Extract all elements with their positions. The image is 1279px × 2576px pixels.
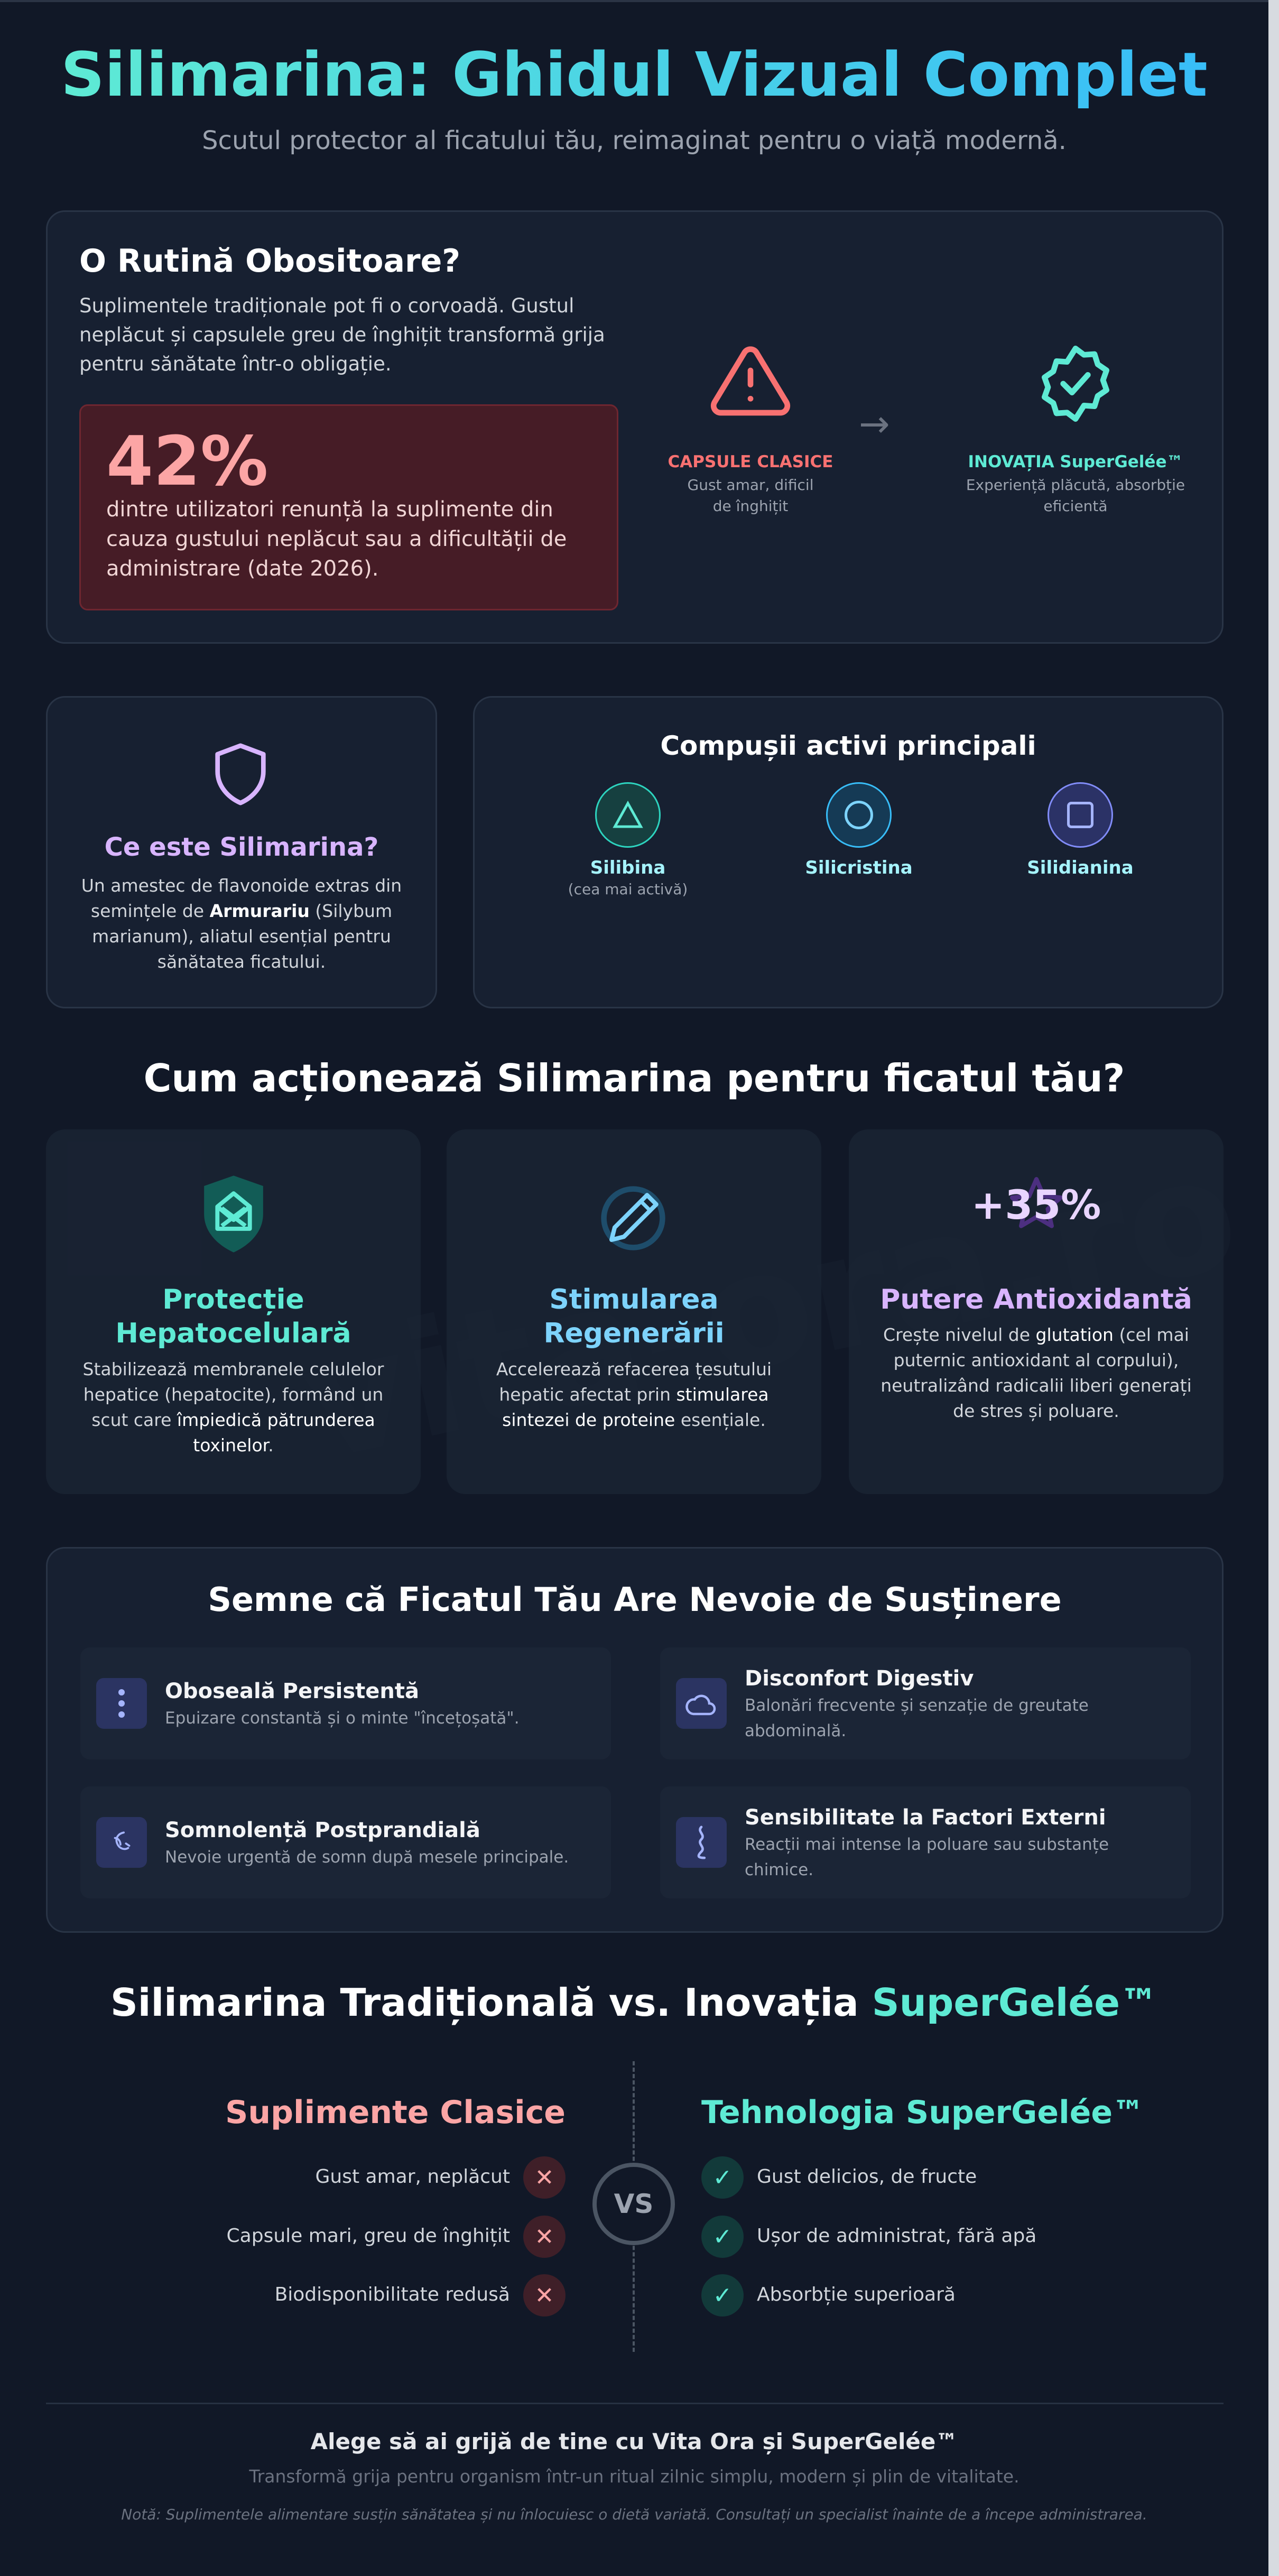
panel: active compounds <box>473 696 1224 1008</box>
title <box>543 1284 725 1349</box>
icon: dots <box>96 1678 147 1729</box>
sign: digestive: Balonări frecvente și senzație de greutate abdominală. <box>745 1696 1089 1740</box>
divider: dashed line <box>633 2061 635 2352</box>
card: protection <box>46 1129 421 1494</box>
sign: sensitivity: Reacții mai intense la poluare sau substanțe chimice. <box>745 1835 1109 1879</box>
column: classic: ✕ <box>535 2164 554 2191</box>
column: classic: ✕ <box>535 2282 554 2309</box>
title: Hepatocelulară <box>115 1318 351 1349</box>
panel: what is silymarin <box>46 696 437 1008</box>
compound: silibina <box>568 782 688 898</box>
panel: signs <box>46 1547 1224 1933</box>
icon: shield envelope <box>204 1175 263 1253</box>
icon: sleep <box>96 1817 147 1868</box>
title: Silimarina: Ghidul Vizual Complet <box>61 40 1208 110</box>
text: Un amestec de flavonoide extras din semințele de Armurariu (Silybum marianum), aliatul esențial pentru sănătatea ficatului. <box>81 875 402 972</box>
heading: Semne că Ficatul Tău Are Nevoie de Susținere <box>208 1580 1062 1619</box>
compound: silidianina <box>1027 782 1134 878</box>
column: classic: Capsule mari, greu de înghițit <box>227 2225 510 2247</box>
heading: comparison: Silimarina Tradițională vs. Inovația SuperGelée™ <box>110 1980 1158 2025</box>
sign: sensitivity: Sensibilitate la Factori Externi <box>745 1805 1106 1830</box>
sign: sleepiness <box>80 1786 611 1898</box>
icon: +35% star: +35% <box>971 1181 1101 1228</box>
compound: silibina: (cea mai activă) <box>568 881 688 898</box>
title: Putere Antioxidantă <box>880 1284 1192 1315</box>
heading: routine: O Rutină Obositoare? <box>79 243 460 280</box>
compound: silibina: Silibina <box>590 857 665 878</box>
icon: check badge <box>1042 346 1109 422</box>
icon: shield <box>215 743 266 805</box>
sign: fatigue <box>80 1647 611 1759</box>
sign: digestive <box>660 1647 1191 1759</box>
icon: warning <box>710 346 791 415</box>
card: antioxidant <box>849 1129 1224 1494</box>
label: capsule clasice <box>668 452 833 515</box>
sign: fatigue: Epuizare constantă și o minte "încețoșată". <box>165 1709 520 1728</box>
subtitle: Scutul protector al ficatului tău, reimaginat pentru o viață modernă. <box>202 126 1067 155</box>
callout: 42% <box>79 404 618 610</box>
footer: Transformă grija pentru organism într-un ritual zilnic simplu, modern și plin de vitalitate. <box>249 2466 1020 2487</box>
column: classic: Biodisponibilitate redusă <box>275 2284 510 2305</box>
text: Stabilizează membranele celulelor hepatice (hepatocite), formând un scut care împiedică pătrunderea toxinelor. <box>83 1359 384 1456</box>
card: regeneration <box>447 1129 821 1494</box>
vs badge: VS <box>614 2189 653 2219</box>
heading: Compușii activi principali <box>660 730 1036 761</box>
text: Crește nivelul de glutation (cel mai puternic antioxidant al corpului), neutralizând radicalii liberi generați de stres și poluare. <box>881 1324 1192 1421</box>
column: classic: Suplimente Clasice <box>225 2094 566 2131</box>
sign: digestive: Disconfort Digestiv <box>745 1666 974 1691</box>
panel: routine <box>46 210 1224 644</box>
text: routine intro: Suplimentele tradiționale pot fi o corvoadă. Gustul neplăcut și capsulele greu de înghițit transformă grija pentru sănătate într-o obligație. <box>79 294 605 375</box>
label: inovatia <box>966 452 1185 515</box>
compound: silicristina <box>805 782 913 878</box>
footer: Alege să ai grijă de tine cu Vita Ora și SuperGelée™ <box>311 2429 958 2454</box>
label: inovatia: INOVAȚIA SuperGelée™ <box>968 452 1183 471</box>
column: supergelee: Ușor de administrat, fără apă <box>757 2225 1036 2247</box>
sign: sleepiness: Somnolență Postprandială <box>165 1818 480 1842</box>
vs badge <box>592 2163 675 2245</box>
sign: sleepiness: Nevoie urgentă de somn după mesele principale. <box>165 1848 569 1867</box>
column: classic: ✕ <box>535 2223 554 2250</box>
callout: 42%: 42% <box>106 422 268 501</box>
comparison <box>225 2061 1144 2352</box>
sign: fatigue: Oboseală Persistentă <box>165 1679 419 1703</box>
column: classic <box>225 2094 566 2316</box>
label: capsule clasice: CAPSULE CLASICE <box>668 452 833 471</box>
heading: how it works: Cum acționează Silimarina pentru ficatul tău? <box>144 1056 1125 1100</box>
text: Accelerează refacerea țesutului hepatic afectat prin stimularea sintezei de proteine esențiale. <box>496 1359 772 1430</box>
icon: squiggle <box>676 1817 727 1868</box>
column: supergelee: ✓ <box>713 2282 732 2309</box>
title: Regenerării <box>543 1318 725 1349</box>
column: supergelee: Gust delicios, de fructe <box>757 2166 977 2188</box>
column: supergelee <box>701 2051 1177 2347</box>
sign: sensitivity <box>660 1786 1191 1898</box>
footer <box>0 2429 1268 2523</box>
icon: pencil <box>601 1186 665 1250</box>
icon: cloud <box>676 1678 727 1729</box>
compound: silicristina: Silicristina <box>805 857 913 878</box>
compound: silidianina: Silidianina <box>1027 857 1134 878</box>
title: Stimularea <box>549 1284 719 1315</box>
title: Protecție <box>162 1284 304 1315</box>
arrow: → <box>859 402 890 446</box>
column: classic: Gust amar, neplăcut <box>315 2166 510 2188</box>
column: supergelee: Tehnologia SuperGelée™ <box>701 2094 1144 2131</box>
callout: 42%: dintre utilizatori renunță la suplimente din cauza gustului neplăcut sau a dificultății de administrare (date 2026). <box>106 497 567 581</box>
column: supergelee: ✓ <box>713 2164 732 2191</box>
column: supergelee: ✓ <box>713 2223 732 2250</box>
watermark: vita-ora.ro <box>287 1119 1253 1497</box>
label: inovatia: Experiență plăcută, absorbție eficientă <box>966 476 1185 515</box>
label: capsule clasice: Gust amar, dificil de înghițit <box>688 476 813 515</box>
heading: Ce este Silimarina? <box>105 832 378 862</box>
footer: Notă: Suplimentele alimentare susțin sănătatea și nu înlocuiesc o dietă variată. Consultați un specialist înainte de a începe administrarea. <box>121 2506 1147 2523</box>
title <box>115 1284 351 1349</box>
column: supergelee: Absorbție superioară <box>757 2284 956 2305</box>
